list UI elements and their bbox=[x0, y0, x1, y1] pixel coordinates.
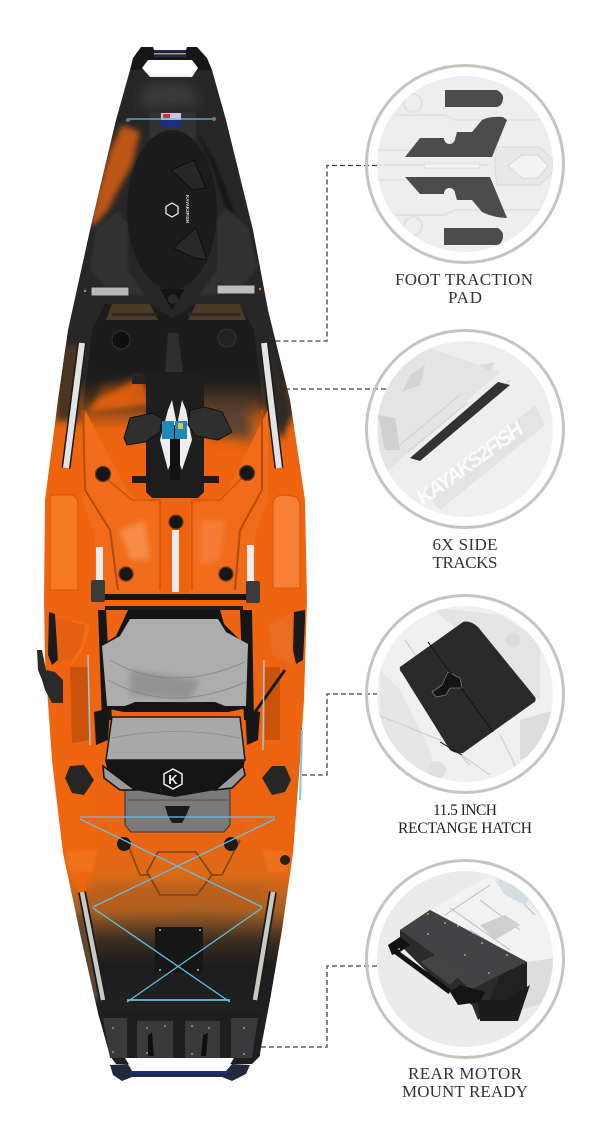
floor tracks bbox=[96, 530, 254, 592]
bow oval hatch: KAYAK2FISH bbox=[185, 195, 190, 223]
feature: foot traction pad bbox=[366, 66, 564, 262]
stern carry handle bbox=[110, 1058, 250, 1081]
bow handle opening bbox=[142, 60, 198, 77]
cockpit well bbox=[82, 304, 264, 415]
rear floor plate bbox=[155, 927, 203, 973]
seat frame bbox=[91, 580, 260, 720]
seat back bbox=[100, 610, 250, 712]
hull colour swirls bbox=[52, 84, 304, 1000]
seat logo panel bbox=[103, 760, 245, 797]
label: rear motor mount: MOUNT READY bbox=[402, 1082, 528, 1101]
side grab handles and lever bbox=[37, 610, 305, 800]
bungee cords bbox=[80, 817, 275, 1002]
stern motor mount block bbox=[98, 1013, 262, 1064]
detail circle: side track: KAYAKS2FISH bbox=[412, 417, 529, 510]
pedals bbox=[124, 407, 232, 483]
small bow tracks bbox=[84, 285, 261, 296]
deck scupper pods bbox=[96, 466, 254, 581]
label: foot traction pad: FOOT TRACTION bbox=[395, 270, 533, 289]
detail circle: hatch bbox=[377, 606, 555, 785]
ring bbox=[366, 596, 564, 792]
detail circle: stern bbox=[377, 871, 555, 1047]
label: foot traction pad: PAD bbox=[448, 288, 482, 307]
bow oval hatch bbox=[127, 130, 217, 290]
rear hatch bbox=[125, 787, 230, 832]
black track bbox=[410, 382, 510, 461]
hatch lid bbox=[400, 622, 536, 753]
stern block bbox=[400, 910, 527, 1020]
ring bbox=[366, 66, 564, 262]
bow flag and cord bbox=[126, 113, 216, 127]
feature: rear motor mount bbox=[366, 860, 564, 1058]
seat base bbox=[88, 655, 285, 760]
rear black pads bbox=[65, 765, 291, 795]
side tracks bbox=[66, 343, 279, 468]
hatch latch bbox=[432, 672, 462, 697]
bow deck moulding bbox=[90, 112, 258, 296]
pad shapes bbox=[405, 90, 507, 245]
ring bbox=[366, 860, 564, 1058]
mid deck mouldings bbox=[50, 410, 300, 743]
motor mount handle bbox=[388, 937, 485, 1005]
label: side tracks: 6X SIDE bbox=[432, 535, 498, 554]
pedal drive plate bbox=[132, 373, 204, 498]
kayak top view bbox=[37, 47, 307, 1081]
label: side tracks: TRACKS bbox=[432, 553, 498, 572]
ring bbox=[366, 330, 564, 528]
label: rectangle hatch: 11.5 INCH bbox=[433, 802, 497, 819]
feature: side tracks bbox=[366, 330, 564, 528]
stern hexagon emboss and pods bbox=[66, 837, 291, 895]
detail circle: side track bbox=[377, 341, 555, 520]
label: rear motor mount: REAR MOTOR bbox=[408, 1064, 523, 1083]
detail circle: traction pads bbox=[377, 76, 553, 252]
feature: rectangle hatch bbox=[366, 596, 564, 792]
bow bottle holder bbox=[160, 289, 185, 310]
label: rectangle hatch: RECTANGE HATCH bbox=[398, 820, 532, 837]
hull bbox=[44, 70, 307, 1053]
rear side tracks bbox=[82, 892, 273, 1000]
leader lines bbox=[190, 166, 386, 1047]
bow carry handle bbox=[130, 47, 212, 70]
seat logo panel: K bbox=[168, 772, 178, 787]
